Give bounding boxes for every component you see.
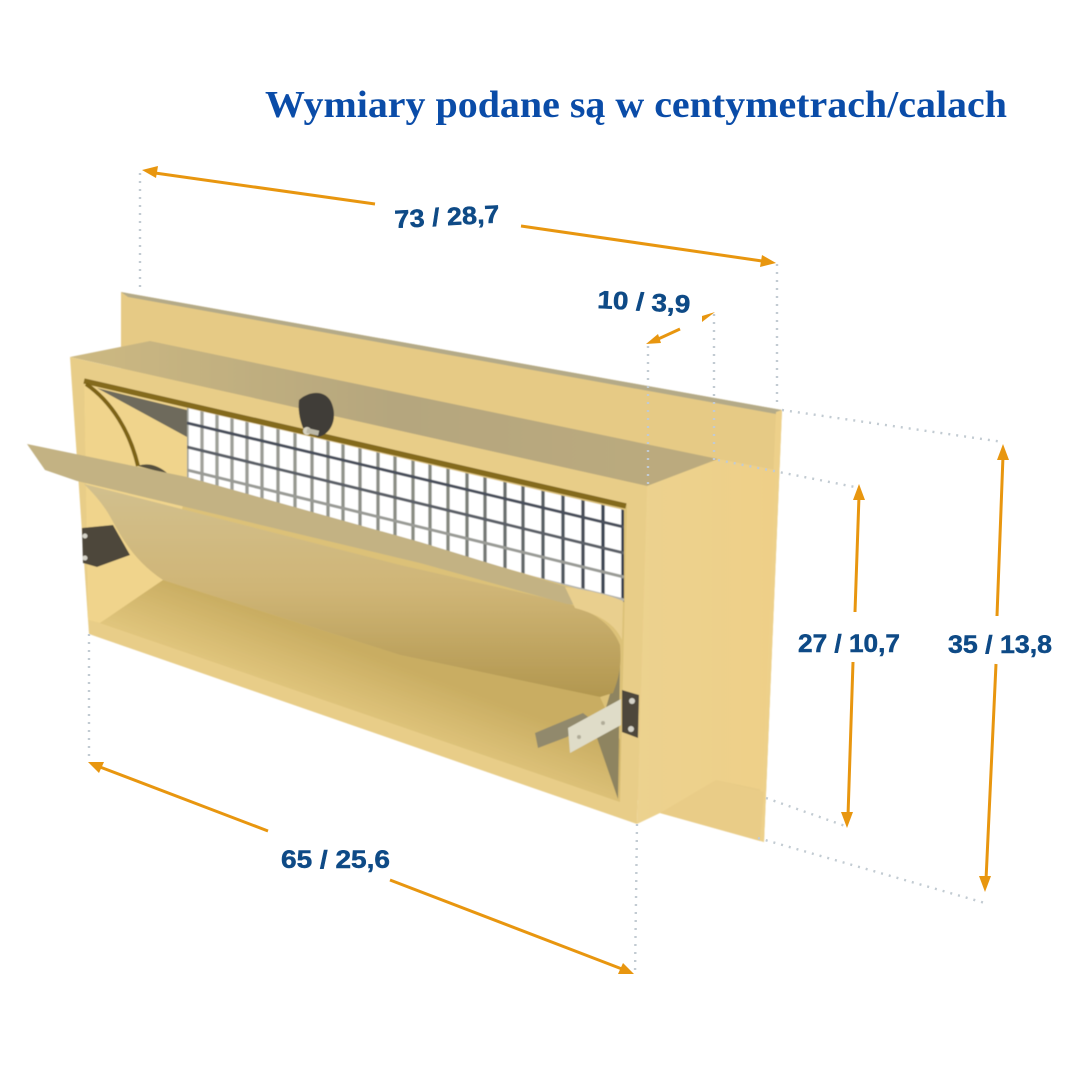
left bracket: [82, 525, 130, 567]
dimension: height 35 / 13,8: [948, 444, 1052, 892]
dimension: height 35 / 13,8: 35 / 13,8: [948, 631, 1052, 659]
title: Wymiary podane są w centymetrach/calach: [265, 84, 1007, 126]
opening interior: [84, 380, 627, 802]
right bracket: [535, 690, 639, 753]
curved rod: [86, 384, 138, 466]
flap pivot: [138, 464, 168, 474]
dimension: width 73 / 28,7: 73 / 28,7: [394, 201, 500, 234]
box side face: [637, 459, 776, 824]
dimension: depth 10 / 3,9: 10 / 3,9: [597, 286, 691, 319]
dimension: depth 10 / 3,9: [597, 286, 715, 344]
box top face: [70, 341, 718, 486]
flap belly: [84, 484, 621, 697]
dimension: opening height 27 / 10,7: [798, 484, 900, 828]
back plate: [121, 292, 782, 842]
hinge rod: [84, 381, 626, 506]
knob: [299, 393, 334, 437]
dimension: width 65 / 25,6: 65 / 25,6: [281, 846, 390, 874]
dark gauze triangle: [97, 388, 187, 437]
box front frame: [70, 357, 647, 824]
curled flap end: [565, 587, 623, 640]
dimension: opening height 27 / 10,7: 27 / 10,7: [798, 630, 900, 658]
flap lip: [27, 444, 578, 605]
dimension: width 65 / 25,6: [88, 762, 634, 974]
wire mesh: [187, 400, 627, 610]
dimension: width 73 / 28,7: [142, 166, 776, 267]
dotted extension lines: [89, 173, 1003, 975]
louvre vent illustration: [27, 292, 782, 842]
